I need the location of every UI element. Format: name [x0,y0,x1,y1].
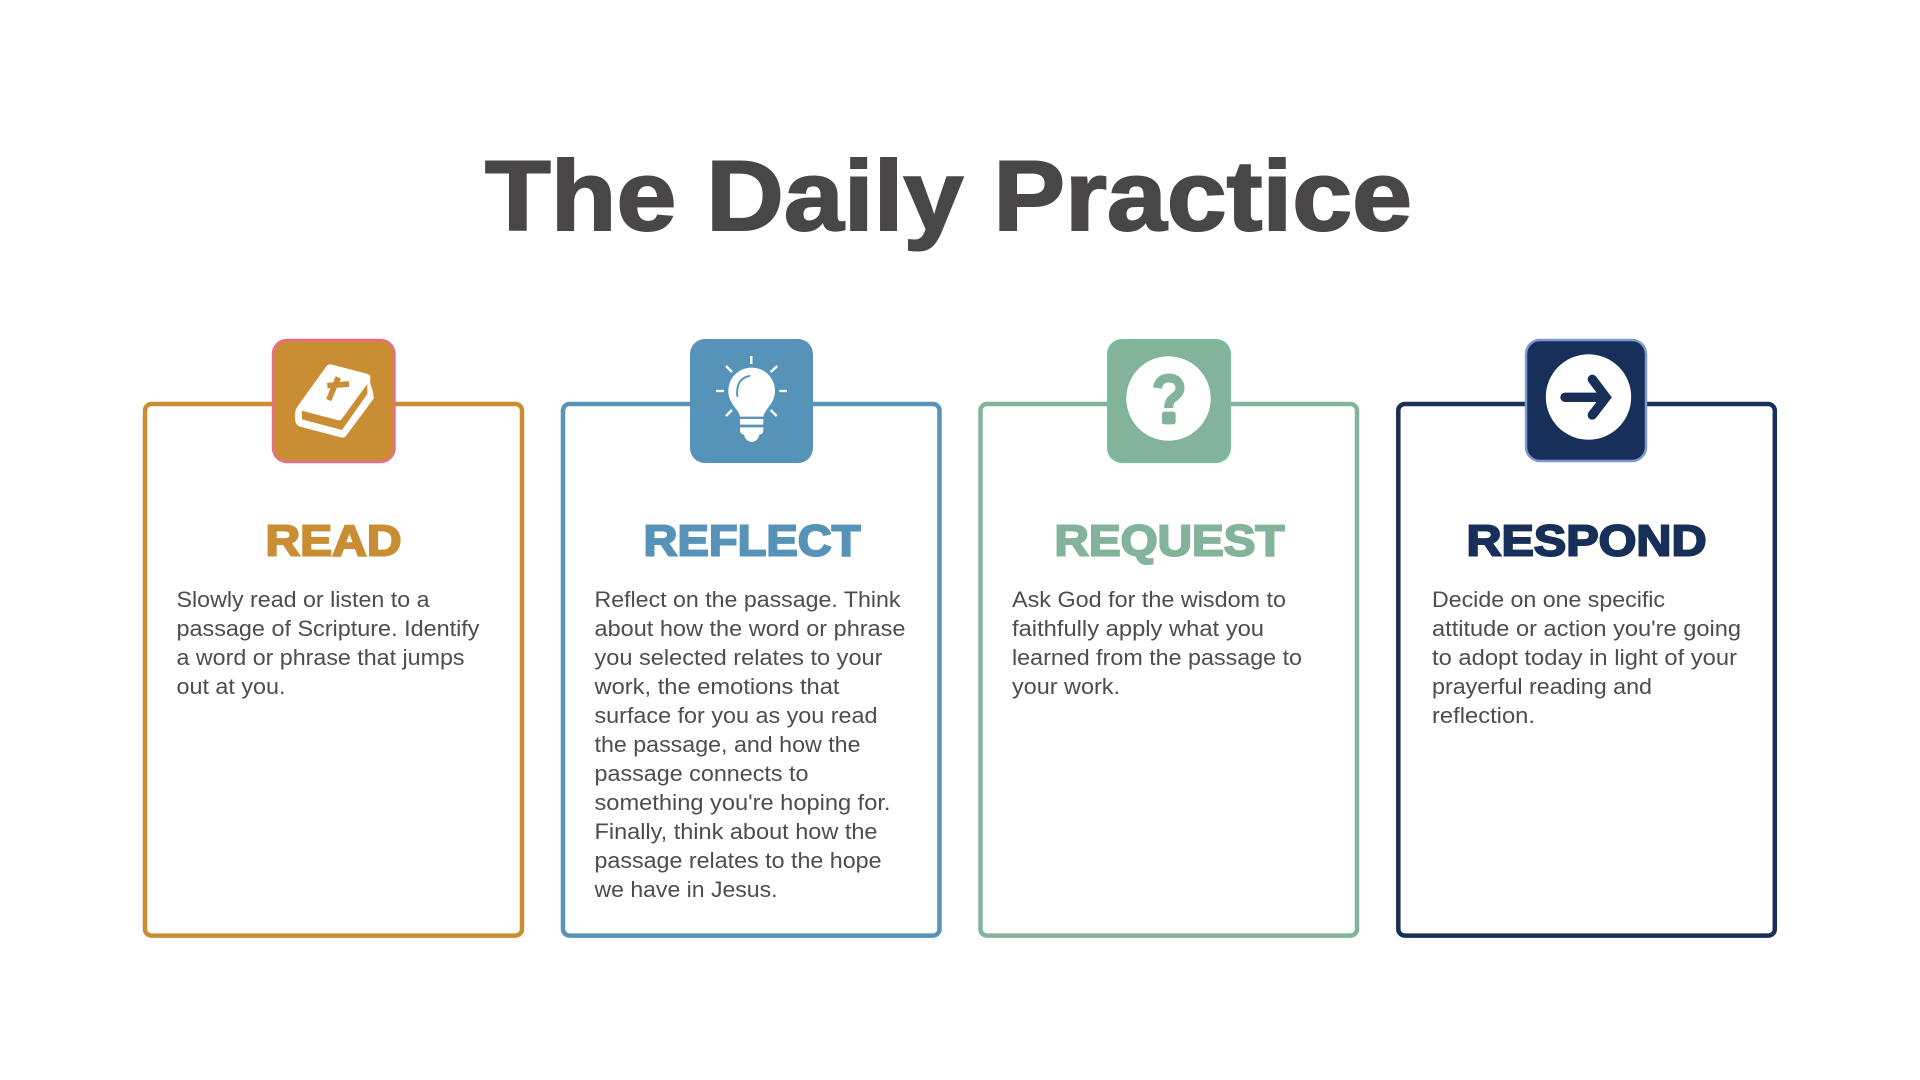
read body text: out at you. [176,674,286,699]
respond body text: to adopt today in light of your [1432,645,1738,670]
reflect body text: Reflect on the passage. Think [594,587,901,612]
icon: light bulb [690,339,813,463]
respond body text: Decide on one specific [1432,587,1665,612]
request body text: faithfully apply what you [1012,616,1264,641]
reflect card border [563,404,940,936]
reflect body text: something you're hoping for. [594,790,890,815]
read body text: a word or phrase that jumps [176,645,464,670]
heading: RESPOND: RESPOND [1466,516,1706,566]
reflect body text: work, the emotions that [593,674,840,699]
respond body text [1432,587,1741,728]
reflect body text: you selected relates to your [594,645,883,670]
icon: question mark [1108,340,1230,462]
reflect body text: we have in Jesus. [593,877,778,902]
panel: request [980,340,1357,936]
reflect body text: about how the word or phrase [594,616,906,641]
request body text: Ask God for the wisdom to [1012,587,1286,612]
respond body text: attitude or action you're going [1432,616,1741,641]
request body text: your work. [1012,674,1120,699]
respond card border [1398,404,1775,936]
title: The Daily Practice [485,140,1412,251]
reflect body text: passage relates to the hope [594,848,882,873]
request body text [1012,587,1302,699]
icon: arrow [1526,340,1646,461]
respond body text: reflection. [1432,703,1535,728]
read body text: Slowly read or listen to a [176,587,430,612]
icon: bible [273,340,394,462]
reflect body text: Finally, think about how the [594,819,878,844]
reflect body text: the passage, and how the [594,732,860,757]
reflect body text [593,587,906,902]
read card border [145,404,522,936]
heading: REFLECT: REFLECT [644,516,861,566]
request card border [980,404,1357,936]
read body text: passage of Scripture. Identify [176,616,480,641]
respond body text: prayerful reading and [1432,674,1652,699]
panel: respond [1398,340,1775,936]
reflect body text: passage connects to [594,761,808,786]
read body text [176,587,480,699]
panel: read [145,340,522,936]
request body text: learned from the passage to [1012,645,1302,670]
heading: REQUEST: REQUEST [1054,516,1285,566]
panel: reflect [563,339,940,936]
reflect body text: surface for you as you read [594,703,878,728]
heading: READ: READ [266,516,402,566]
